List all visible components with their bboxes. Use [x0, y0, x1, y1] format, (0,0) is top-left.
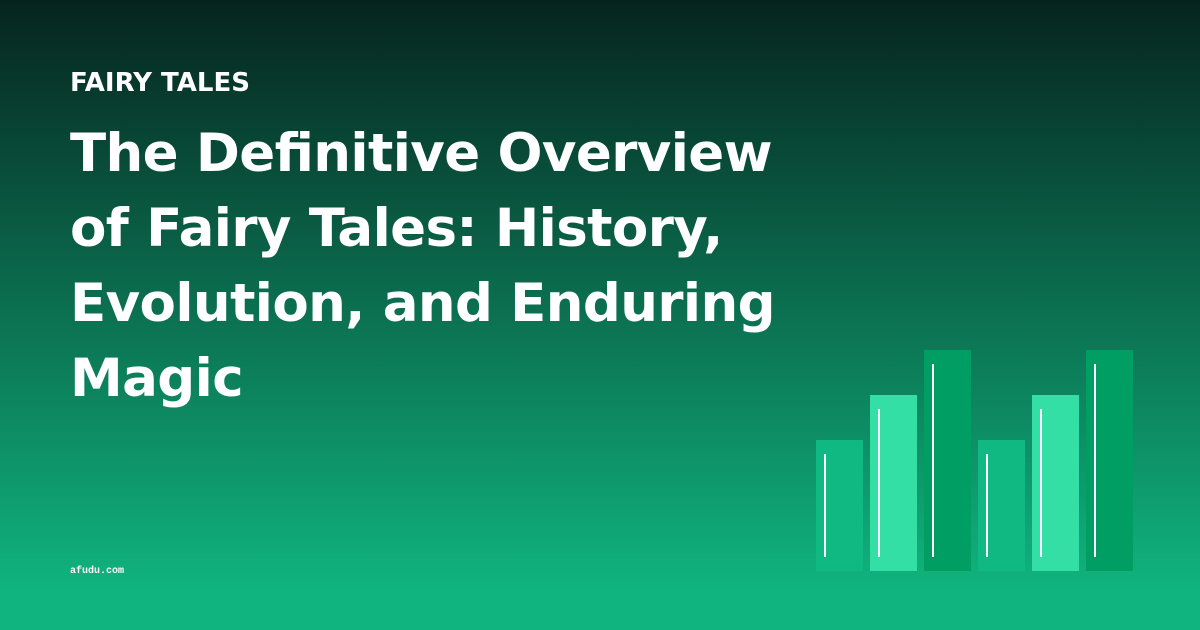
- bar 4: [978, 440, 1025, 571]
- bar 2: [870, 395, 917, 571]
- title: Magic: [70, 348, 243, 409]
- title: [70, 123, 775, 409]
- title: of Fairy Tales: History,: [70, 198, 723, 259]
- footer: site name: afudu.com: [70, 566, 124, 577]
- title: Evolution, and Enduring: [70, 273, 775, 334]
- title: The Definitive Overview: [70, 123, 772, 184]
- bar 1: [816, 440, 863, 571]
- bar 6: [1086, 350, 1133, 571]
- chart: decorative bars: [816, 350, 1133, 571]
- bar 5: [1032, 395, 1079, 571]
- eyebrow: category label: FAIRY TALES: [70, 68, 250, 98]
- bar 3: [924, 350, 971, 571]
